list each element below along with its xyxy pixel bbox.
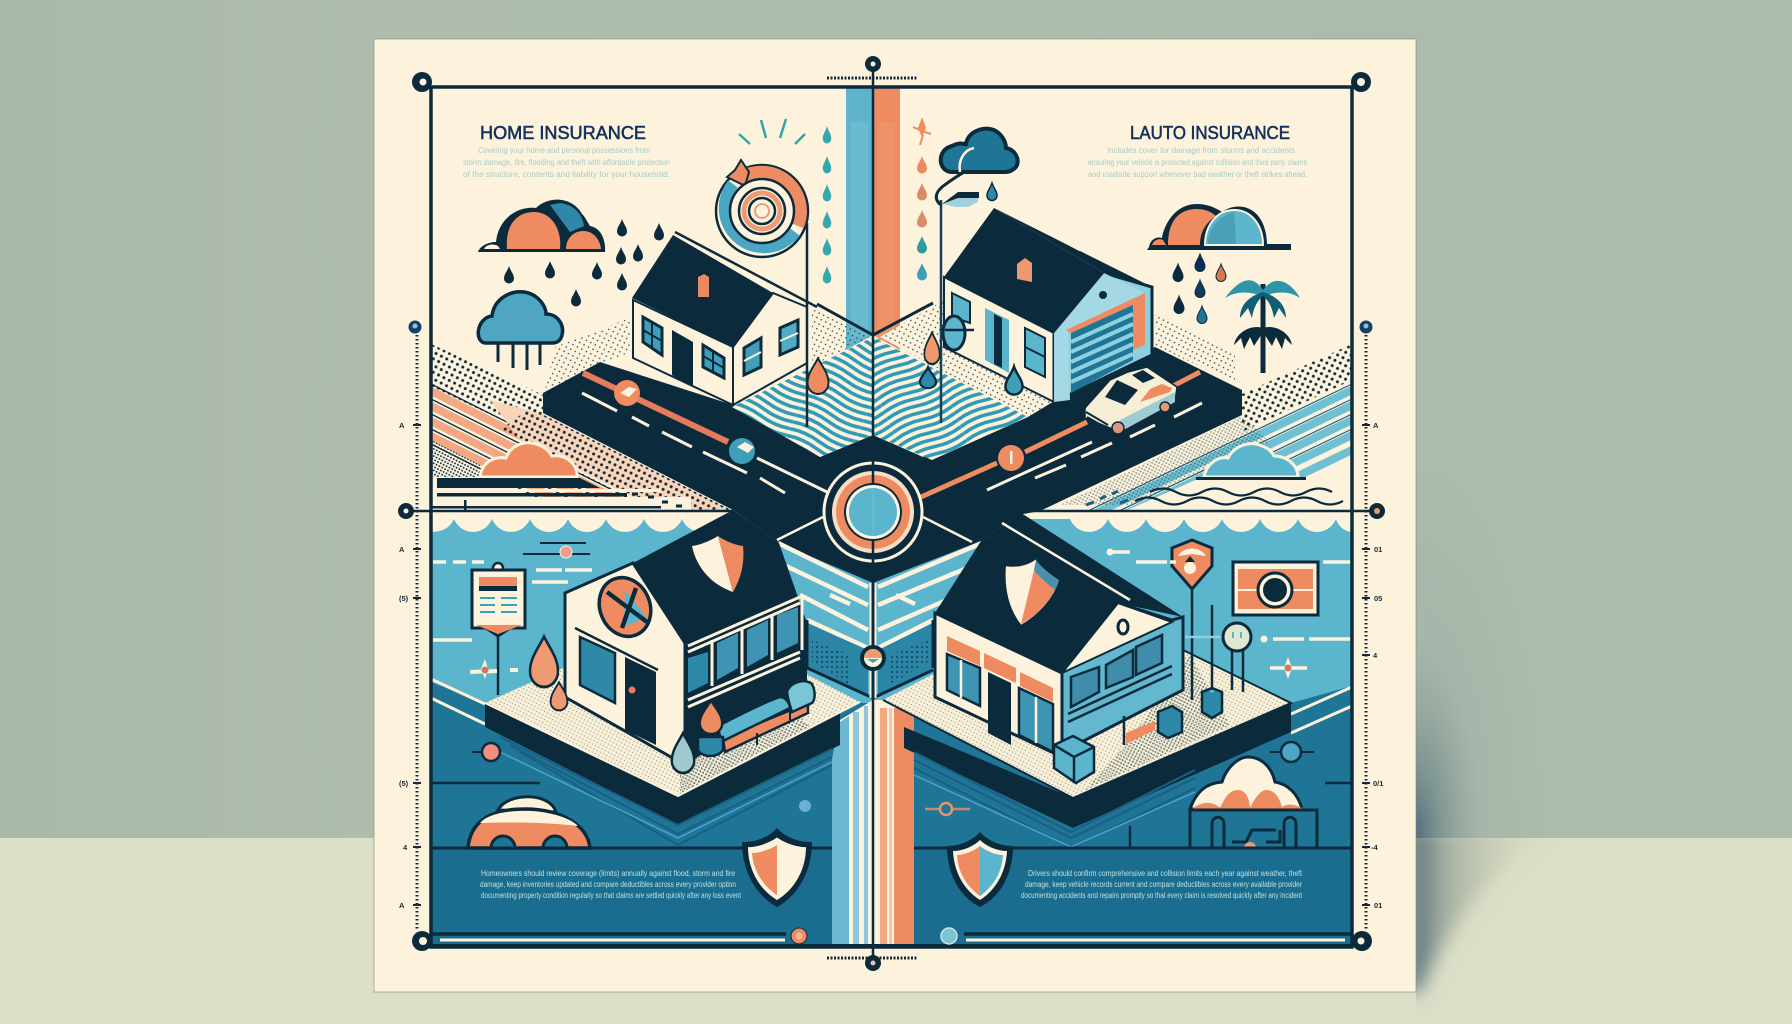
icon: palm tree	[1225, 280, 1300, 373]
heading: auto insurance: LAUTO INSURANCE	[1130, 123, 1290, 143]
roof shield right	[1005, 558, 1060, 626]
text block: auto insurance summary: ensuring your vehicle is protected against collision and third party claims	[1088, 158, 1307, 167]
left platform	[485, 650, 860, 845]
right wall windows	[688, 597, 802, 707]
coral drop column right	[913, 120, 931, 280]
crate boxes	[1054, 688, 1222, 783]
ruler labels: 4	[403, 843, 408, 852]
water pattern panels	[732, 337, 1028, 460]
droplets around auto house	[920, 316, 1022, 395]
central top stripes	[846, 87, 900, 350]
poster sheet	[374, 39, 1416, 992]
right platform	[883, 650, 1291, 848]
scalloped cream wave band	[431, 511, 1352, 532]
text block: lower right notes: Drivers should confirm comprehensive and collision limits each year against weather, theft	[1028, 869, 1303, 878]
ruler labels: A	[399, 421, 405, 430]
droplet icons lower left	[530, 637, 723, 773]
ruler labels: 01	[1374, 545, 1382, 554]
street lamp and cloud	[936, 129, 1018, 423]
text block: lower left notes: Homeowners should review coverage (limits) annually against flood, storm and fire	[481, 869, 735, 878]
ruler labels: 01	[1374, 901, 1382, 910]
ruler labels: A	[399, 545, 405, 554]
chimney	[1017, 258, 1032, 282]
lower left decorative marks	[431, 543, 811, 812]
left field with stripes and halftone	[432, 344, 730, 510]
ruler labels: 0/1	[1373, 779, 1383, 788]
ruler labels: -4	[1371, 843, 1378, 852]
globe lamp posts	[1185, 605, 1251, 692]
icon: covered dome vehicle	[468, 797, 590, 848]
ruler labels	[399, 421, 1383, 910]
ruler labels: A	[1373, 421, 1379, 430]
frame	[406, 64, 1377, 963]
icon: cloud topped building	[1190, 757, 1317, 848]
text block: home insurance summary: Covering your home and personal possessions from	[478, 146, 650, 155]
text block: home insurance summary: of the structure, contents and liability for your household.	[463, 170, 670, 179]
side windows	[1071, 667, 1099, 707]
text block: lower right notes: damage, keep vehicle records current and compare deductibles across every available provider	[1025, 880, 1302, 889]
storm spiral icon	[716, 160, 808, 257]
ruler labels: (5)	[399, 594, 409, 603]
teal drop column left	[823, 126, 831, 284]
coral cloud in left field	[431, 443, 691, 511]
roof shield left	[686, 528, 744, 597]
ruler labels: 05	[1374, 594, 1382, 603]
ruler labels: (5)	[399, 779, 409, 788]
poster shadow on wall	[1416, 40, 1566, 838]
ruler labels: 4	[1373, 651, 1378, 660]
awnings	[947, 636, 980, 666]
central medallion	[824, 461, 922, 563]
text block: lower right notes: documenting accidents and repairs promptly so that every claim is resolved quickly after any incident	[1021, 891, 1303, 900]
icon: coral and blue cloud	[1147, 204, 1291, 250]
poster shadow on floor	[1416, 838, 1517, 1003]
icon: coral storm cloud	[478, 200, 605, 252]
sun rays	[739, 119, 805, 144]
central lower block	[778, 543, 982, 698]
upper left house	[632, 232, 817, 405]
garage door	[1066, 293, 1145, 393]
coral sign with lens	[1233, 562, 1318, 615]
background floor	[0, 838, 1792, 1024]
text block: lower left notes: documenting property condition regularly so that claims are settled quickly after any loss event	[481, 891, 742, 900]
text block: home insurance summary	[463, 146, 670, 179]
text block: auto insurance summary: and roadside support whenever bad weather or theft strikes ahead.	[1088, 170, 1307, 179]
map pin shield	[1172, 540, 1212, 700]
shop windows	[947, 654, 980, 706]
frame corner nodes	[398, 56, 1385, 971]
ruler scales	[413, 78, 1370, 958]
pole with coral pin	[807, 223, 828, 427]
shield left	[742, 828, 812, 907]
lower panel background	[431, 511, 1352, 947]
blue cloud and wavy lines in right field	[1086, 444, 1343, 505]
right field with stripes and halftone	[1062, 346, 1350, 510]
ruler labels: A	[399, 901, 405, 910]
round window	[591, 570, 659, 644]
rain drops right	[1173, 254, 1226, 324]
upper right house	[944, 207, 1152, 402]
shield right	[947, 832, 1013, 907]
rain drops left	[504, 219, 664, 306]
chimney	[698, 274, 709, 297]
heading: home insurance: HOME INSURANCE	[480, 123, 646, 143]
central lower stripes	[832, 700, 914, 945]
icon: car	[1085, 367, 1177, 434]
text block: home insurance summary: storm damage, fire, flooding and theft with affordable protection	[463, 158, 670, 167]
text block: auto insurance summary	[1088, 146, 1307, 179]
right road centre line	[921, 372, 1202, 497]
band divider	[431, 846, 1352, 850]
text block: lower left notes: damage, keep inventories updated and compare deductibles across every provider option	[480, 880, 736, 889]
central road intersection	[543, 347, 1242, 583]
text block: auto insurance summary: Includes cover for damage from storms and accidents	[1107, 146, 1295, 155]
icon: sofa	[719, 681, 815, 752]
halftone ground patches	[545, 300, 1235, 417]
text block: lower left notes	[480, 869, 742, 900]
text block: lower right notes	[1021, 869, 1303, 900]
lower left house	[565, 510, 807, 765]
sign board with list	[472, 563, 525, 695]
lower right house	[935, 511, 1183, 757]
icon: blue rain cloud	[478, 292, 563, 370]
lower right decorative marks	[925, 548, 1352, 848]
left road centre line	[582, 373, 827, 493]
icon: dark teal cloud	[941, 129, 1018, 172]
